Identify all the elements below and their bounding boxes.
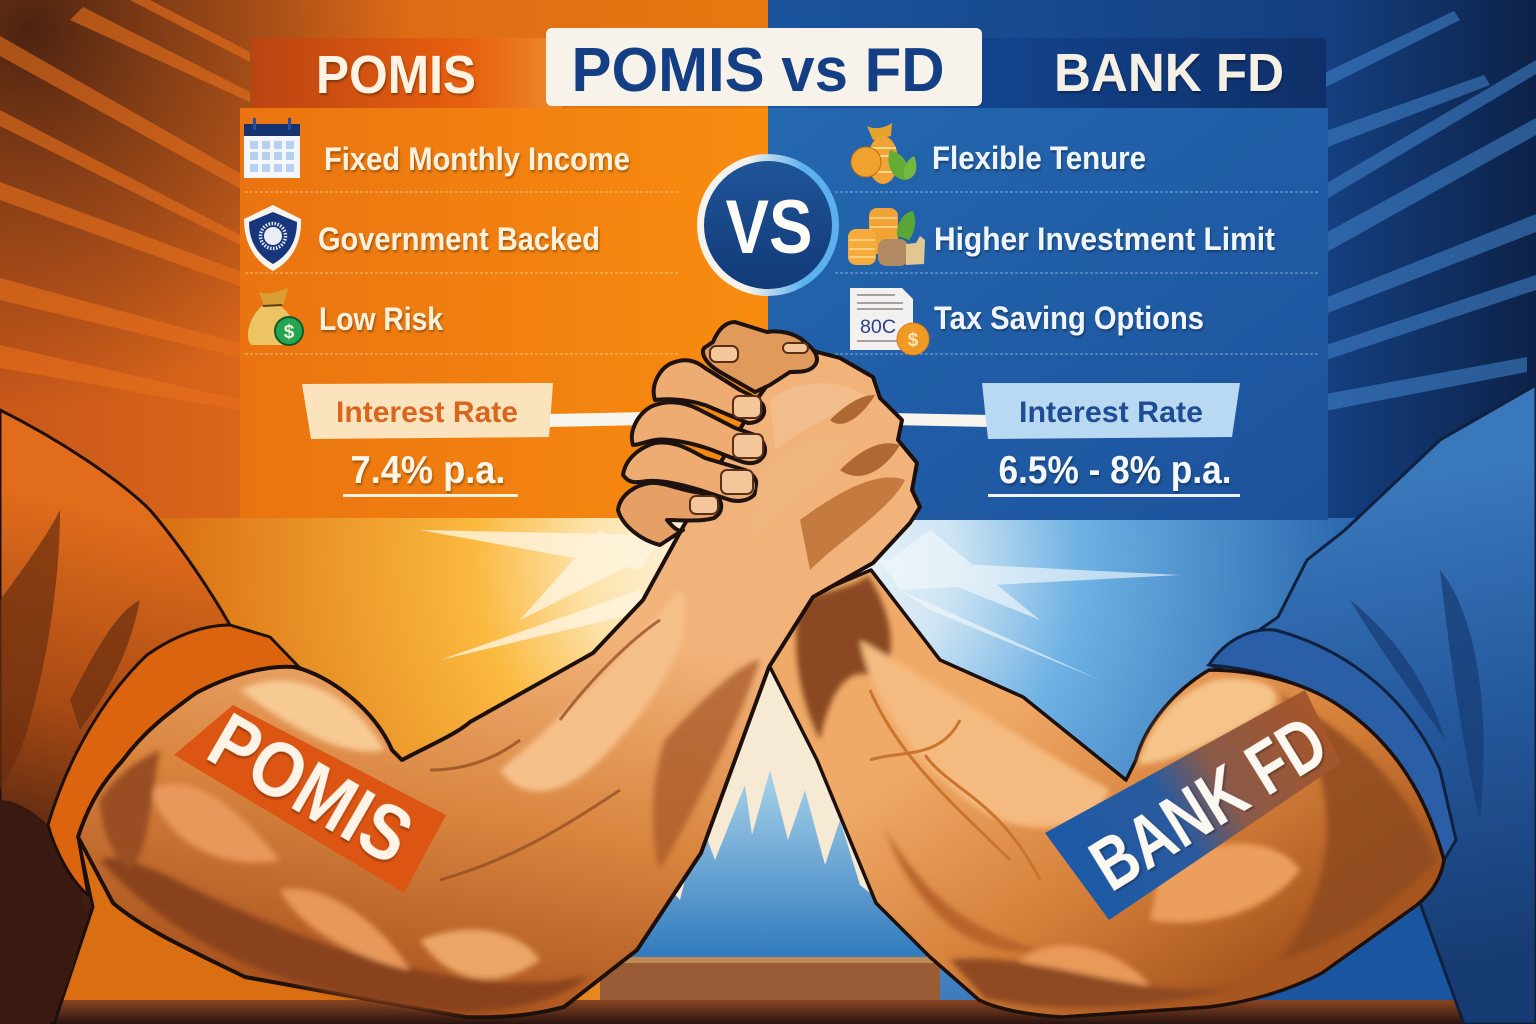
label: Bank FD on arm: BANK FD (1076, 700, 1341, 907)
header bar: POMIS: POMIS (316, 45, 476, 105)
label: Bank FD on arm (1045, 690, 1341, 920)
centre pale gap (610, 660, 935, 960)
text: Flexible Tenure: Flexible Tenure (932, 140, 1146, 176)
background: orange half (0, 0, 768, 1024)
VS badge: VS (726, 185, 812, 270)
icon: 80C document (850, 288, 929, 355)
light burst: orange side (0, 518, 768, 1008)
text: Fixed Monthly Income: Fixed Monthly Income (324, 141, 630, 177)
finger 1 (654, 360, 764, 423)
icon: money bag (248, 288, 303, 345)
panel: POMIS background (240, 108, 768, 518)
background: dark corner left (0, 0, 420, 420)
centre ice spikes (610, 770, 935, 960)
callout: POMIS interest rate (302, 383, 553, 497)
text: Higher Investment Limit: Higher Investment Limit (934, 221, 1275, 257)
background: blue half (768, 0, 1536, 1024)
icon: coin stacks (848, 208, 925, 266)
light burst: blue side (768, 518, 1536, 1008)
label: POMIS on arm: POMIS (194, 696, 427, 881)
finger 2 (632, 402, 765, 463)
icon: 80C document: 80C (860, 317, 896, 338)
row dividers (245, 192, 680, 354)
background rays: right (1320, 11, 1536, 412)
right sleeve cuff (1209, 630, 1456, 860)
callout: Bank FD interest rate: 6.5% - 8% p.a. (998, 449, 1232, 492)
panel: Bank FD background (768, 108, 1328, 520)
icon: coin bag and leaf (851, 123, 916, 184)
top thumb (703, 322, 817, 392)
right arm (768, 570, 1444, 1017)
callout: Bank FD interest rate: Interest Rate (1019, 396, 1203, 429)
header bar: Bank FD: BANK FD (1054, 43, 1284, 103)
icon: money bag: $ (284, 322, 295, 343)
VS badge (697, 154, 839, 296)
icon: 80C document: $ (908, 330, 919, 351)
title: POMIS vs FD (572, 36, 944, 105)
background rays: left (0, 0, 250, 412)
callout: POMIS interest rate: 7.4% p.a. (350, 449, 506, 492)
left shirt (0, 410, 299, 1024)
text: Government Backed: Government Backed (318, 221, 600, 257)
hand highlights (750, 383, 905, 570)
left sleeve cuff (48, 625, 299, 895)
clasped hands (618, 322, 817, 545)
finger 4 (618, 483, 721, 545)
header bar: Bank FD (970, 38, 1326, 108)
left arm and hand (78, 345, 920, 1017)
right shirt (1209, 385, 1536, 1024)
burst spikes: blue side (880, 530, 1180, 680)
text: Low Risk: Low Risk (319, 301, 443, 337)
icon: calendar (244, 118, 300, 178)
callout: Bank FD interest rate (982, 383, 1240, 497)
header bar: POMIS (252, 38, 562, 108)
left arm shading (100, 590, 760, 1013)
icon: government shield (244, 205, 301, 271)
text: Tax Saving Options: Tax Saving Options (934, 300, 1204, 336)
table and floor (40, 957, 1480, 1024)
fingernails (690, 343, 808, 514)
burst spikes: orange side (420, 530, 660, 660)
connector strips (548, 412, 990, 427)
callout: POMIS interest rate: Interest Rate (336, 396, 518, 429)
finger 3 (623, 442, 757, 501)
right forearm shading (796, 575, 1436, 1008)
